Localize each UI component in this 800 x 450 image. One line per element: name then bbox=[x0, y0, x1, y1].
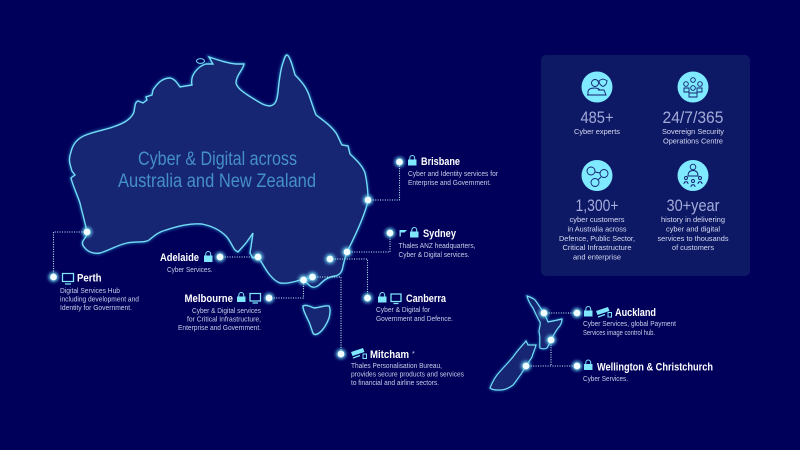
location: Auckland: Auckland bbox=[615, 307, 656, 319]
location: Brisbane: Brisbane bbox=[421, 156, 460, 168]
location: Auckland: Services image control hub. bbox=[583, 330, 655, 337]
location: Brisbane: Enterprise and Government. bbox=[408, 180, 491, 187]
location nodes bbox=[48, 157, 582, 371]
stat: cyber customers bbox=[559, 160, 635, 262]
stat: cyber customers: in Australia across bbox=[568, 224, 627, 234]
map: Australia bbox=[69, 55, 368, 334]
location: Canberra bbox=[376, 293, 453, 323]
location: Brisbane: Cyber and Identity services for bbox=[408, 171, 499, 178]
location: Sydney: Thales ANZ headquarters, bbox=[398, 243, 476, 250]
location: Mitcham: to financial and airline sectors. bbox=[351, 380, 439, 387]
location: Perth: including development and bbox=[60, 296, 139, 304]
stat: years of history: 30+year bbox=[666, 196, 720, 215]
stat: years of history bbox=[658, 160, 729, 252]
location: Melbourne: Cyber & Digital services bbox=[192, 308, 261, 315]
location: Auckland bbox=[583, 307, 676, 337]
location: Melbourne: for Critical Infrastructure, bbox=[187, 316, 261, 324]
stat: cyber customers: and enterprise bbox=[573, 252, 621, 262]
location: Mitcham: provides secure products and services bbox=[351, 372, 464, 378]
map title bbox=[118, 149, 316, 192]
stat: years of history: history in delivering bbox=[661, 215, 725, 224]
location: Melbourne: Enterprise and Government. bbox=[178, 325, 261, 332]
location: Sydney: Sydney bbox=[423, 228, 457, 240]
stat: cyber customers: 1,300+ bbox=[576, 196, 619, 215]
location: Melbourne: Melbourne bbox=[184, 293, 233, 305]
location: Wellington and Christchurch: Cyber Services. bbox=[583, 376, 628, 383]
location: Adelaide: Cyber Services. bbox=[167, 267, 213, 274]
stat: cyber customers: Defence, Public Sector, bbox=[559, 234, 635, 243]
location: Perth: Perth bbox=[77, 272, 102, 284]
stat: years of history: of customers bbox=[672, 243, 714, 252]
location: Canberra: Government and Defence. bbox=[376, 316, 453, 323]
location: Mitcham: * bbox=[412, 351, 415, 358]
location: Adelaide: Adelaide bbox=[160, 252, 199, 264]
location: Mitcham: Mitcham bbox=[370, 349, 409, 361]
map: New Zealand bbox=[490, 296, 562, 390]
location: Wellington and Christchurch bbox=[583, 360, 713, 383]
connector lines bbox=[54, 162, 577, 366]
stat: cyber experts bbox=[574, 72, 620, 136]
stat: security operations centre: 24/7/365 bbox=[662, 108, 724, 127]
stat: security operations centre: Operations Centre bbox=[663, 136, 723, 146]
stat: cyber experts: 485+ bbox=[580, 108, 614, 127]
location: Perth: Digital Services Hub bbox=[60, 288, 120, 295]
map title: Australia and New Zealand bbox=[118, 171, 316, 192]
location: Adelaide bbox=[160, 252, 213, 274]
location: Mitcham bbox=[351, 348, 464, 387]
stat: cyber customers: cyber customers bbox=[570, 215, 625, 224]
stat: years of history: cyber and digital bbox=[666, 224, 720, 234]
stat: cyber customers: Critical Infrastructure bbox=[562, 243, 632, 252]
location: Auckland: Cyber Services, global Payment bbox=[583, 321, 676, 328]
location: Mitcham: Thales Personalisation Bureau, bbox=[351, 363, 442, 370]
location: Canberra: Canberra bbox=[406, 293, 447, 305]
panel: key statistics bbox=[541, 55, 750, 276]
location: Melbourne bbox=[178, 293, 261, 332]
stat: years of history: services to thousands bbox=[658, 234, 729, 243]
location: Sydney bbox=[398, 228, 476, 259]
stat: security operations centre bbox=[662, 72, 724, 146]
stat: cyber experts: Cyber experts bbox=[574, 127, 620, 136]
location: Perth: Identity for Government. bbox=[60, 305, 132, 312]
location: Sydney: Cyber & Digital services. bbox=[398, 252, 470, 259]
location: Perth bbox=[60, 272, 139, 312]
location: Canberra: Cyber & Digital for bbox=[376, 307, 431, 314]
location: Wellington and Christchurch: Wellington & Christchurch bbox=[597, 362, 713, 374]
map title: Cyber & Digital across bbox=[138, 149, 297, 170]
stat: security operations centre: Sovereign Security bbox=[662, 127, 724, 136]
location: Brisbane bbox=[408, 156, 499, 187]
